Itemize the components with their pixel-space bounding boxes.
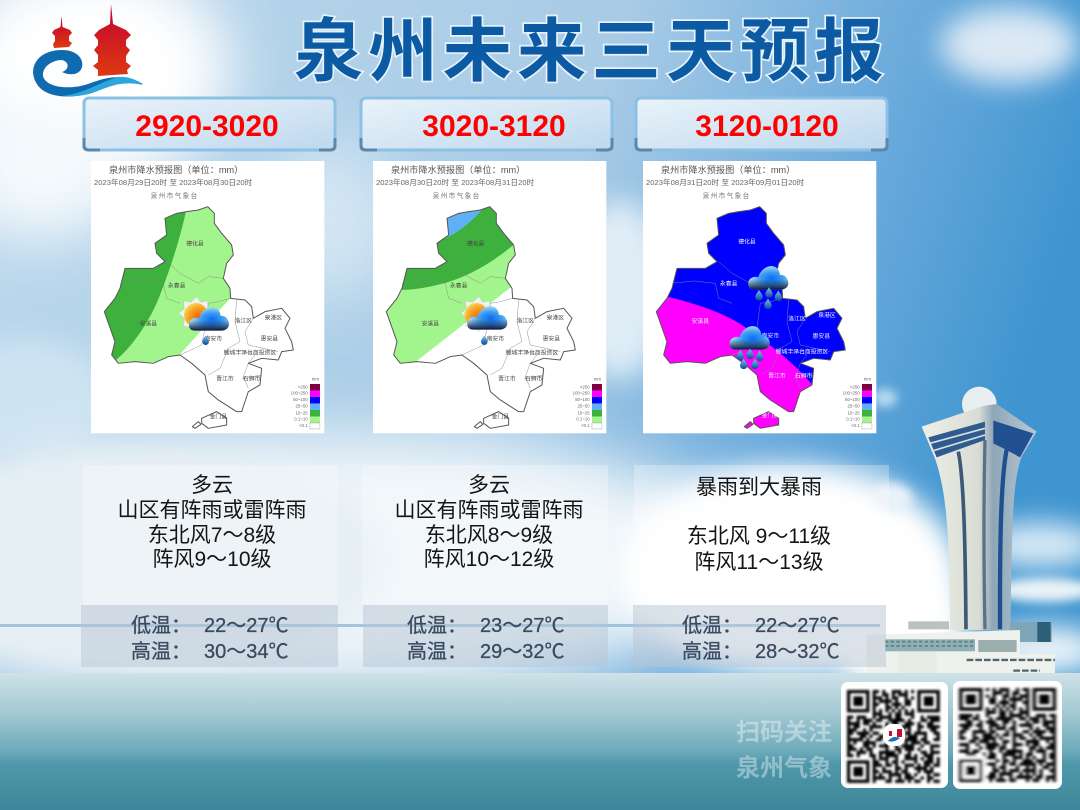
temperatures column 2: 低温：: [407, 614, 467, 637]
icon: heavy rain cloud south: [730, 326, 770, 369]
legend: 50~100: [293, 397, 308, 402]
panel: rainfall map 3: 泉港区: [818, 311, 836, 319]
panel: rainfall map 2: 金门县: [492, 413, 509, 421]
panel: rainfall map 3: 德化县: [738, 238, 756, 246]
panel: forecast column 2: 多云: [468, 474, 510, 497]
panel: rainfall map 1: [91, 161, 324, 433]
panel: rainfall map 2: 德化县: [467, 239, 485, 247]
panel: rainfall map 2: 泉州市气象台: [433, 191, 481, 200]
icon: sun behind cloud with rain drop: [179, 297, 229, 345]
legend: 25~50: [847, 404, 860, 409]
legend: 10~25: [847, 410, 860, 415]
panel: forecast column 2: [362, 465, 608, 667]
legend: 10~25: [577, 410, 590, 415]
panel: rainfall map 2: 惠安县: [543, 334, 560, 342]
temperatures column 3: 28～32℃: [755, 641, 840, 663]
legend: <0.1: [851, 423, 860, 428]
panel: rainfall map 1: 鲤城丰泽台商投资区: [224, 349, 276, 357]
panel: rainfall map 1: 泉州市气象台: [151, 191, 199, 200]
legend: 10~25: [295, 410, 308, 415]
legend: >250: [298, 384, 308, 389]
panel: rainfall map 1: 金门县: [210, 413, 227, 421]
panel: rainfall map 1: 永春县: [168, 282, 186, 290]
scan prompt text: 泉州气象: [736, 755, 832, 782]
legend: >250: [850, 384, 860, 389]
panel: rainfall map 3: 惠安县: [813, 332, 830, 340]
panel: rainfall map 2: 洛江区: [517, 317, 534, 325]
temperatures column 1: [81, 605, 338, 667]
legend: >250: [580, 384, 590, 389]
temperatures column 2: 23～27℃: [480, 615, 564, 637]
legend: [291, 377, 320, 429]
tower landmark: [867, 387, 1055, 673]
legend: 25~50: [295, 404, 308, 409]
legend: 0.1~10: [846, 417, 860, 422]
panel: rainfall map 3: 2023年08月31日20时 至 2023年09月01日20时: [646, 177, 805, 187]
panel: rainfall map 3: 泉州市降水预报图（单位：mm）: [661, 164, 795, 175]
logo: pagodas and wave: [33, 4, 143, 96]
panel: rainfall map 1: 德化县: [186, 239, 204, 247]
icon: sun behind cloud with rain drop: [461, 297, 507, 345]
bottom teal band: [0, 673, 1080, 810]
legend: 25~50: [577, 404, 590, 409]
date box 3: 3120-0120: [695, 110, 839, 143]
panel: forecast column 1: 山区有阵雨或雷阵雨: [118, 499, 306, 522]
panel: rainfall map 1: 洛江区: [235, 317, 252, 325]
panel: rainfall map 3: 晋江市: [768, 372, 786, 380]
panel: rainfall map 1: 晋江市: [216, 374, 234, 382]
panel: rainfall map 3: 鲤城丰泽台商投资区: [776, 348, 828, 356]
panel: rainfall map 2: [373, 161, 606, 433]
legend: 0.1~10: [576, 417, 590, 422]
panel: forecast column 1: 东北风7～8级: [148, 524, 276, 547]
panel: rainfall map 2: 石狮市: [525, 374, 543, 382]
panel: rainfall map 3: 石狮市: [795, 372, 813, 380]
legend: 50~100: [845, 397, 860, 402]
scan prompt text: 扫码关注: [736, 719, 832, 746]
panel: rainfall map 2: 鲤城丰泽台商投资区: [506, 349, 558, 357]
panel: rainfall map 3: 金门县: [762, 411, 779, 419]
panel: rainfall map 2: 泉港区: [547, 313, 564, 321]
legend: mm: [594, 377, 601, 382]
temperatures column 3: 22～27℃: [755, 615, 840, 637]
date box 3: [636, 98, 887, 150]
date box 1: 2920-3020: [135, 110, 279, 143]
date box 2: 3020-3120: [422, 110, 566, 143]
legend: 100~250: [573, 391, 590, 396]
legend: [573, 377, 602, 429]
date box 2: [361, 98, 612, 150]
panel: rainfall map 1: 泉州市降水预报图（单位：mm）: [109, 164, 243, 175]
panel: rainfall map 2: 泉州市降水预报图（单位：mm）: [391, 164, 525, 175]
temperatures column 2: 高温：: [407, 640, 467, 663]
panel: rainfall map 2: 2023年08月30日20时 至 2023年08月31日20时: [376, 177, 535, 187]
panel: rainfall map 3: [643, 161, 876, 435]
legend: <0.1: [299, 423, 308, 428]
panel: rainfall map 3: 永春县: [720, 279, 738, 287]
panel: rainfall map 2: 晋江市: [498, 374, 516, 382]
QR code 1: [841, 682, 948, 788]
panel: forecast column 3: 东北风 9～11级: [687, 525, 831, 548]
temperatures column 1: 低温：: [131, 614, 191, 637]
legend: [843, 377, 872, 429]
panel: forecast column 3: [633, 465, 889, 667]
temperatures column 3: [633, 605, 886, 667]
panel: forecast column 2: 山区有阵雨或雷阵雨: [394, 499, 584, 522]
legend: mm: [312, 377, 319, 382]
panel: rainfall map 3: 南安市: [762, 332, 779, 340]
panel: rainfall map 2: 安溪县: [422, 319, 439, 327]
panel: forecast column 3: 阵风11～13级: [694, 551, 824, 574]
panel: rainfall map 1: 泉港区: [265, 313, 282, 321]
panel: forecast column 3: 暴雨到大暴雨: [696, 476, 822, 499]
temperatures column 3: 高温：: [682, 640, 742, 663]
scan prompt text: [736, 719, 832, 782]
panel: forecast column 2: 阵风10～12级: [424, 548, 554, 571]
panel: forecast column 2: 东北风8～9级: [425, 524, 553, 547]
panel: rainfall map 1: 惠安县: [261, 334, 278, 342]
temperatures column 2: 29～32℃: [480, 641, 564, 663]
temperatures column 2: [363, 605, 608, 667]
panel: rainfall map 3: 安溪县: [692, 317, 709, 325]
panel: rainfall map 1: 2023年08月29日20时 至 2023年08月30日20时: [94, 177, 253, 187]
legend: 100~250: [291, 391, 308, 396]
panel: rainfall map 1: 石狮市: [243, 374, 261, 382]
temperatures column 1: 高温：: [131, 640, 191, 663]
panel: forecast column 1: 阵风9～10级: [152, 548, 272, 571]
icon: heavy rain cloud north: [748, 266, 788, 309]
panel: forecast column 1: [81, 465, 338, 667]
legend: mm: [864, 377, 871, 382]
legend: <0.1: [581, 423, 590, 428]
panel: forecast column 1: 多云: [191, 474, 233, 497]
legend: 100~250: [843, 391, 860, 396]
QR code 2: [953, 681, 1062, 789]
panel: rainfall map 1: 安溪县: [140, 319, 157, 327]
legend: 50~100: [575, 397, 590, 402]
temperatures column 1: 22～27℃: [204, 615, 288, 637]
panel: rainfall map 2: 南安市: [487, 334, 504, 342]
panel: rainfall map 3: 泉州市气象台: [703, 191, 751, 200]
panel: rainfall map 1: 南安市: [205, 334, 222, 342]
panel: rainfall map 2: 永春县: [450, 282, 468, 290]
temperatures column 3: 低温：: [682, 614, 742, 637]
temperatures column 1: 30～34℃: [204, 641, 288, 663]
date header boxes: [84, 98, 887, 150]
legend: 0.1~10: [294, 417, 308, 422]
panel: rainfall map 3: 洛江区: [788, 314, 806, 322]
date box 1: [84, 98, 335, 150]
